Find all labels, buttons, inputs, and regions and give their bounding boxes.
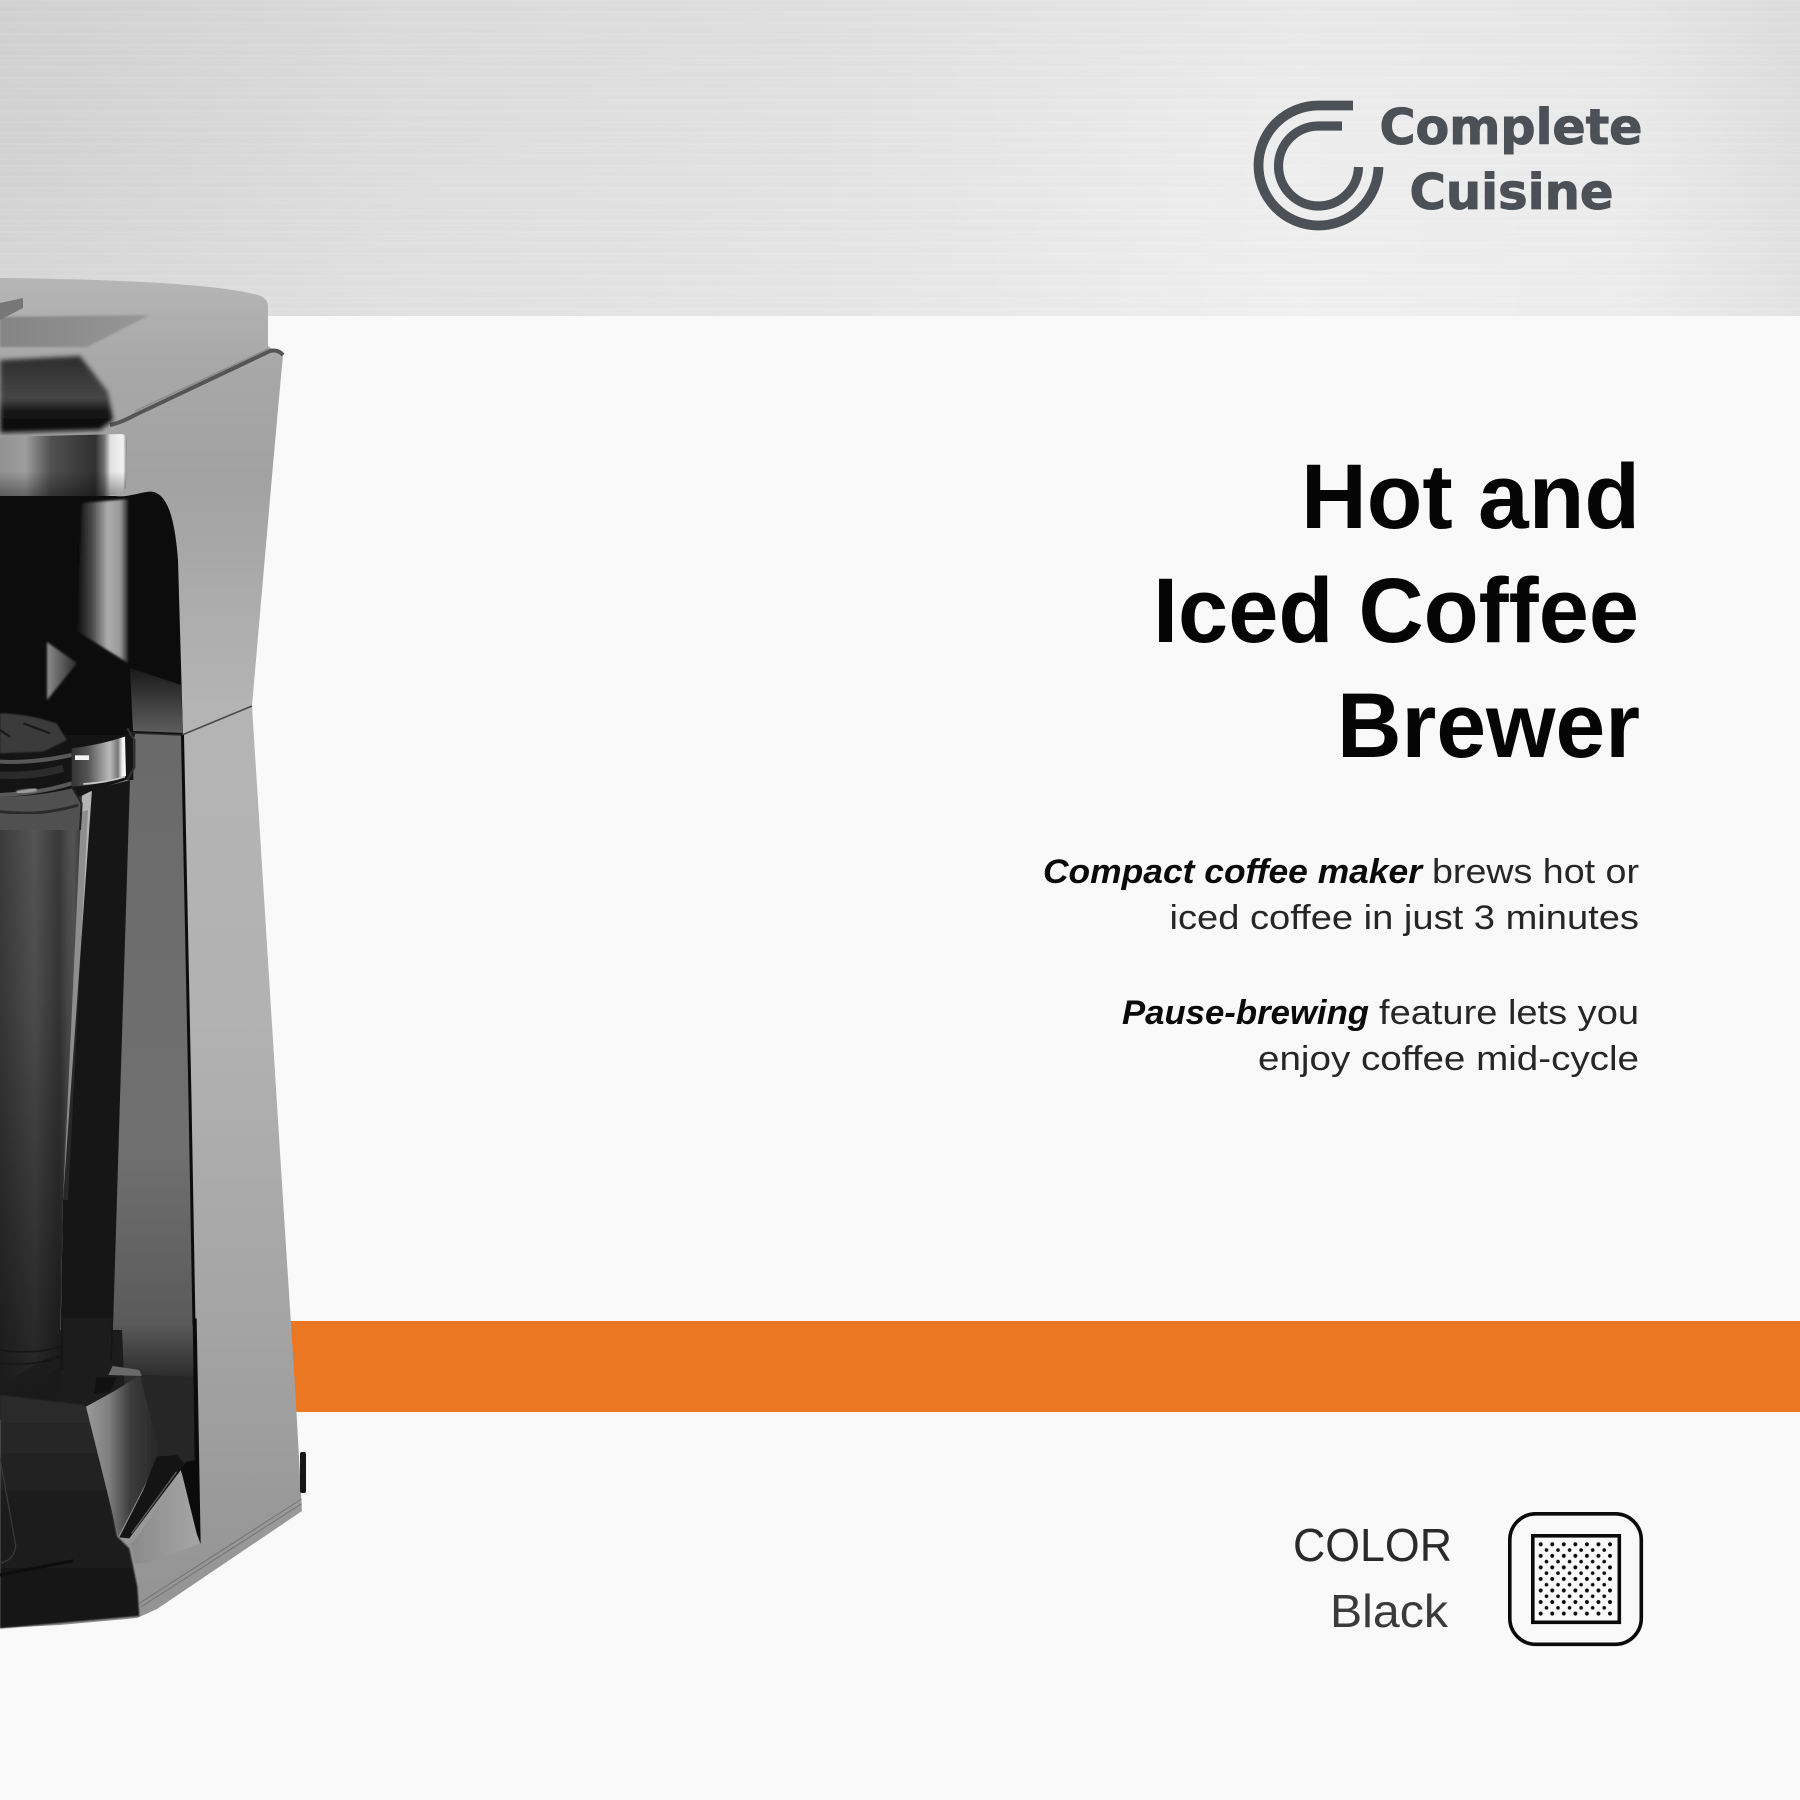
lower facet: [131, 1470, 199, 1563]
logo: Complete Cuisine: [1259, 99, 1642, 226]
color swatch icon: [1510, 1514, 1641, 1644]
carafe foot column: [63, 1318, 112, 1400]
panel line wedge: [181, 1318, 201, 1544]
front gray strip: [112, 733, 198, 1480]
carafe shoulder: [0, 788, 82, 830]
seams and main panel line: [133, 706, 252, 1325]
logo wordmark: Complete: [1380, 99, 1642, 156]
dark block above base: [140, 1375, 198, 1473]
feature text: pause-brewing: Pause-brewing: [1122, 994, 1369, 1032]
feature text: compact coffee maker: Compact coffee maker: [1043, 853, 1424, 891]
feature text: pause-brewing: [1122, 994, 1639, 1078]
carafe glass: [0, 795, 88, 1385]
front window outline: [0, 1458, 16, 1563]
logo wordmark: [1380, 99, 1642, 221]
logo wordmark: Cuisine: [1410, 164, 1614, 221]
color label: Black: [1330, 1585, 1449, 1637]
black inner recess and column: [0, 492, 183, 737]
machine body silhouette: [0, 278, 302, 1628]
dark strip beside carafe: [60, 780, 130, 1370]
logo mark: [1259, 106, 1378, 226]
dark neck backdrop: [0, 730, 133, 797]
feature text: pause-brewing: feature lets you: [1379, 994, 1639, 1032]
dark seam on front: [0, 1561, 73, 1575]
small facet highlight: [47, 642, 77, 700]
bottom lip lines: [139, 1499, 302, 1607]
carafe neck and lid: [0, 713, 134, 830]
upper facet: [86, 1375, 160, 1537]
feature text: compact coffee maker: brews hot or: [1432, 853, 1639, 891]
brushed metal header band: [0, 0, 1800, 316]
notch: [119, 1455, 185, 1538]
base of machine: [0, 1318, 302, 1628]
feature text: pause-brewing: enjoy coffee mid-cycle: [1258, 1040, 1639, 1078]
rear foot: [300, 1452, 306, 1493]
lower recess panel: [130, 668, 183, 733]
top knob: [0, 356, 113, 433]
step on platform: [108, 1366, 142, 1376]
mottled lid: [0, 713, 67, 753]
color label: [1293, 1519, 1452, 1637]
ring bracket: [127, 728, 134, 780]
column highlight: [77, 499, 128, 663]
chrome ring: [72, 737, 126, 787]
black front: [0, 1395, 139, 1628]
color label: COLOR: [1293, 1519, 1452, 1571]
bands: [0, 755, 72, 795]
heading: Iced Coffee: [1153, 560, 1639, 662]
feature text: compact coffee maker: [1043, 853, 1639, 937]
light glint on lid: [17, 789, 37, 793]
lid inset panels: [0, 298, 150, 347]
heading: Brewer: [1337, 675, 1640, 777]
chrome collar: [0, 434, 127, 496]
lid rim: [110, 349, 283, 425]
dark backing behind carafe foot: [0, 1330, 126, 1420]
orange stripe: [285, 1321, 1800, 1412]
heading: [1153, 446, 1640, 777]
heading: Hot and: [1301, 446, 1640, 548]
feature text: compact coffee maker: iced coffee in just 3 minutes: [1170, 899, 1639, 937]
